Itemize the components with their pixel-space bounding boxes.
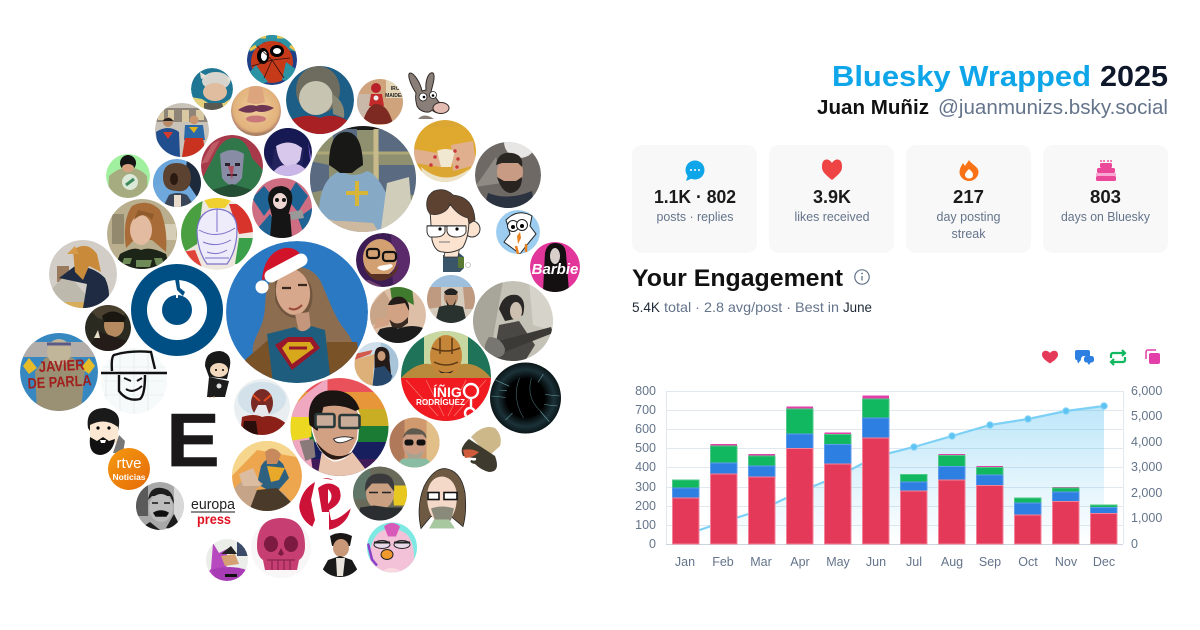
avatar: the thing, inigo rodriguez: RODRÍGUEZ [416,397,465,407]
bar: Nov [1052,487,1079,544]
avatar: cartoon donkey [409,73,449,119]
month labels: Mar [750,555,772,569]
title: Bluesky Wrapped [832,61,1091,93]
month labels: Aug [941,555,963,569]
avatar: rtve noticias: Noticias [112,472,146,482]
avatar: bearded man [475,142,541,208]
avatar: the thing, inigo rodriguez: ÍÑIG [433,383,462,400]
left axis labels: 600 [635,422,656,436]
chart legend icons [1042,350,1160,365]
icon: quotes legend [1146,350,1160,364]
avatar: long-haired cartoon man [419,468,466,528]
icon: flame [960,160,979,181]
panel: likes stat [769,145,894,253]
avatar: hands holding a cup [414,120,476,182]
user name and handle: @juanmunizs.bsky.social [938,97,1168,119]
avatar: dog headed man [153,159,201,207]
chart: monthly engagement stacked bars with cumulative line [635,384,1162,569]
month labels [675,555,1115,569]
heading: your engagement: Your Engagement [632,265,843,292]
title: 2025 [1100,61,1168,93]
icon: heart legend [1042,351,1058,364]
month labels: Nov [1055,555,1078,569]
right axis labels: 2,000 [1131,486,1162,500]
bar: Jan [672,480,699,544]
left axis labels: 200 [635,499,656,513]
avatar: darth vader at laptop [310,126,416,232]
avatar: iron man doll [356,78,405,126]
icon: cake [1096,160,1116,181]
avatar: baby with horned hat [191,68,233,110]
panel: streak stat: day posting [936,210,1001,224]
avatar: europa press logo: europa [191,497,236,513]
panel: streak stat: streak [952,227,986,241]
avatar: iron man doll: IRON [391,86,404,92]
bar: Sep [976,466,1003,544]
panel: streak stat: 217 [953,187,984,207]
avatar: javier de parla: JAVIER [38,357,85,376]
bar: Apr [786,406,813,544]
right axis labels [1131,384,1162,551]
avatar: doctor doom [201,135,263,197]
engagement summary text: 5.4K [632,299,661,315]
bar: Jun [862,396,889,544]
avatar: woman on balcony [354,342,398,386]
right axis labels: 0 [1131,537,1138,551]
chart grid [666,391,1124,544]
panel: days on bluesky stat: days on Bluesky [1061,210,1151,224]
right axis labels: 1,000 [1131,511,1162,525]
month labels: Jul [906,555,922,569]
avatar: tintin style captain [88,408,125,455]
right axis labels: 4,000 [1131,435,1162,449]
avatar: white mask comic [181,198,253,270]
right axis labels: 3,000 [1131,460,1162,474]
avatar: barbie parody: Barbie [532,261,578,278]
icon: info [855,270,869,284]
user name and handle: Juan Muñiz [817,96,929,119]
avatar: purple cartoon hero [205,538,249,582]
month labels: Dec [1093,555,1115,569]
avatar: cartoon man with glasses [427,190,480,272]
user name and handle [817,96,1168,119]
avatar: woman with santa hat [226,241,368,383]
avatar: man with sunglasses [389,417,440,468]
avatar: el espanol E logo [148,395,238,485]
bar: Feb [710,444,737,544]
avatar: lion mask man at desk [49,240,117,308]
month labels: Oct [1018,555,1038,569]
left axis labels: 500 [635,441,656,455]
panel: streak stat [906,145,1031,253]
left axis labels: 700 [635,403,656,417]
avatar: woman with guitar [473,281,553,361]
avatar: europa press logo: press [197,511,231,527]
avatar: el espanol E logo: E [167,398,219,482]
avatar: groucho marx [136,482,184,530]
bar: May [824,432,851,544]
avatar: man among plants [370,287,426,343]
avatar: javier de parla: DE PARLA [27,372,92,393]
bar: Jul [900,474,927,544]
avatar: rtve noticias [108,448,150,490]
avatar: long-haired rocker [107,199,177,269]
left axis labels: 0 [649,537,656,551]
avatar: green jacket on mint [106,154,150,198]
bar: Aug [938,454,965,544]
month labels: Feb [712,555,734,569]
avatar: smiling man with glasses [356,233,410,287]
avatar: black hole [490,362,561,434]
avatar: furby [366,522,418,574]
avatar: iron man doll: MAIDEN [385,93,405,99]
panel: days on bluesky stat: 803 [1090,187,1121,207]
avatar: vintage girl portrait [286,66,354,134]
left axis labels: 400 [635,460,656,474]
avatar: pink skull [251,518,311,578]
avatar: dark haired man in coat [322,533,358,577]
cumulative area [685,406,1104,544]
avatar: p logo red [299,478,351,530]
avatar: rtve noticias: rtve [116,455,142,472]
engagement summary text: total · 2.8 avg/post · Best in [664,299,839,315]
month labels: May [826,555,851,569]
bar: Oct [1014,498,1041,544]
panel: likes stat: likes received [794,210,870,224]
month labels: Jan [675,555,695,569]
left axis labels: 300 [635,480,656,494]
avatar: purple-haired woman [264,128,312,176]
icon: chat bubble [686,160,704,181]
icon: replies legend [1075,350,1094,365]
left axis labels: 100 [635,518,656,532]
avatar: hat doodle on grid [101,348,167,414]
month labels: Apr [790,555,810,569]
avatar: superman illustration [232,441,302,511]
panel: posts and replies stat: posts · replies [656,210,734,224]
stacked bars [672,396,1117,544]
avatar: the thing, inigo rodriguez [401,331,491,423]
month labels: Sep [979,555,1001,569]
avatar: bearded man travel photo [427,275,475,323]
avatar: cartoon daredevil [234,379,290,435]
avatar: old painter portrait [85,305,131,351]
right axis labels: 6,000 [1131,384,1162,398]
left axis labels: 800 [635,384,656,398]
cumulative line [685,403,1107,535]
avatar: cartoon chicken [496,210,540,254]
avatar: europa press logo [191,497,236,527]
panel: avatar bubble cloud [20,35,580,582]
icon: reposts legend [1111,350,1125,365]
avatar: black haired kid cartoon [205,351,230,398]
avatar: two supermen [155,103,209,157]
right axis labels: 5,000 [1131,409,1162,423]
bar: Dec [1090,505,1117,544]
panel: likes stat: 3.9K [813,187,851,207]
avatar: man with grey hair and yellow background [353,466,407,520]
avatar: onda logo [131,264,223,356]
month labels: Jun [866,555,886,569]
avatar: spider-man [247,35,297,85]
avatar: dinosaur with knit hat [462,427,501,472]
bar: Mar [748,454,775,544]
engagement summary text: June [843,299,872,315]
avatar: javier de parla [20,333,98,411]
avatar: goth girl drawing [252,178,312,238]
icon: heart [822,160,842,180]
panel: posts and replies stat: 1.1K · 802 [654,187,736,207]
avatar: rainbow pride cartoon man [290,378,388,477]
avatar: moustache close-up [231,86,281,136]
left axis labels [635,384,656,551]
panel: posts and replies stat [632,145,757,253]
avatar: barbie parody [530,242,580,292]
panel: days on bluesky stat [1043,145,1168,253]
